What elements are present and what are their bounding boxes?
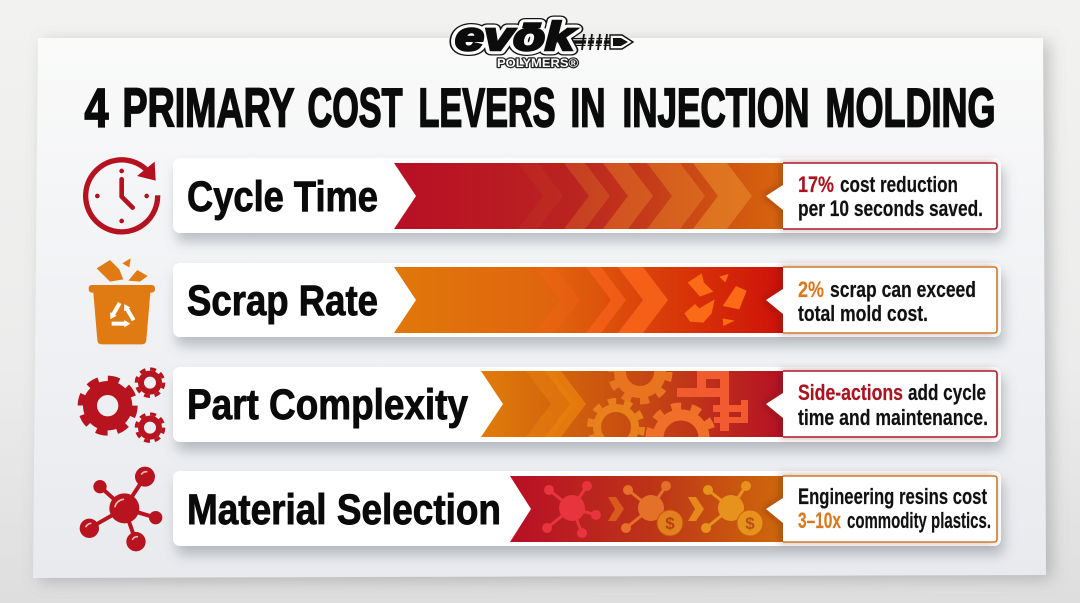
callout text: per 10 seconds saved. <box>798 196 983 221</box>
logo screw <box>566 34 633 50</box>
molecule three with coin <box>701 481 763 536</box>
icon: recycling bin with scrap <box>89 258 155 344</box>
title: PRIMARY <box>122 76 294 138</box>
label: Material Selection <box>187 486 501 534</box>
title: COST <box>308 76 402 138</box>
callout text: Engineering resins cost <box>798 484 988 509</box>
logo wordmark: evōk <box>455 15 576 59</box>
logo wordmark: evōk <box>455 15 576 59</box>
title: MOLDING <box>826 76 996 138</box>
callout text: 17% <box>798 172 834 197</box>
callout <box>766 267 997 333</box>
chevron banner <box>394 163 790 229</box>
logo sub-brand: POLYMERS® <box>497 58 579 70</box>
row: Part Complexity <box>78 364 1010 458</box>
icon: clock with arrow <box>86 160 158 232</box>
icon: gears <box>81 369 164 441</box>
callout text: 3–10x <box>798 508 842 533</box>
title <box>84 76 996 138</box>
row: Scrap Rate <box>89 258 1001 344</box>
label: Cycle Time <box>187 173 378 221</box>
molecule one <box>542 481 601 538</box>
title: 4 <box>84 76 109 138</box>
chevron banner with scrap pieces <box>394 267 790 333</box>
row: Cycle Time <box>86 158 1001 233</box>
callout <box>766 371 997 437</box>
title: LEVERS <box>418 76 556 138</box>
row: Material Selection <box>80 467 1001 551</box>
callout text: Side-actions <box>798 380 903 405</box>
label: Scrap Rate <box>187 277 378 325</box>
callout text: add cycle <box>908 380 986 405</box>
arrow <box>608 497 624 521</box>
chevron banner with gears and pipes <box>481 371 783 437</box>
title: INJECTION <box>622 76 810 138</box>
callout text <box>798 380 988 430</box>
callout text <box>798 172 983 221</box>
logo: Evok Polymers <box>455 15 633 70</box>
chevron banner with molecules and coins <box>510 476 790 542</box>
icon: molecule <box>80 467 162 551</box>
label card <box>173 367 1001 442</box>
arrow <box>688 497 704 521</box>
label card <box>173 263 1001 337</box>
callout text: time and maintenance. <box>798 405 988 430</box>
callout text <box>798 484 991 533</box>
molecule three with coin: $ <box>745 514 755 533</box>
callout text: commodity plastics. <box>847 508 991 533</box>
title: IN <box>570 76 606 138</box>
logo wordmark: evōk <box>455 15 576 59</box>
callout <box>766 163 997 229</box>
label card <box>173 158 1001 233</box>
label: Part Complexity <box>187 381 468 429</box>
callout text: scrap can exceed <box>830 277 976 302</box>
callout text: cost reduction <box>840 172 958 197</box>
callout text: 2% <box>798 277 824 302</box>
callout text: total mold cost. <box>798 301 928 326</box>
label card <box>173 471 1001 546</box>
molecule two with coin: $ <box>665 514 675 533</box>
callout text <box>798 277 976 326</box>
molecule two with coin <box>621 481 683 536</box>
callout <box>766 476 997 542</box>
